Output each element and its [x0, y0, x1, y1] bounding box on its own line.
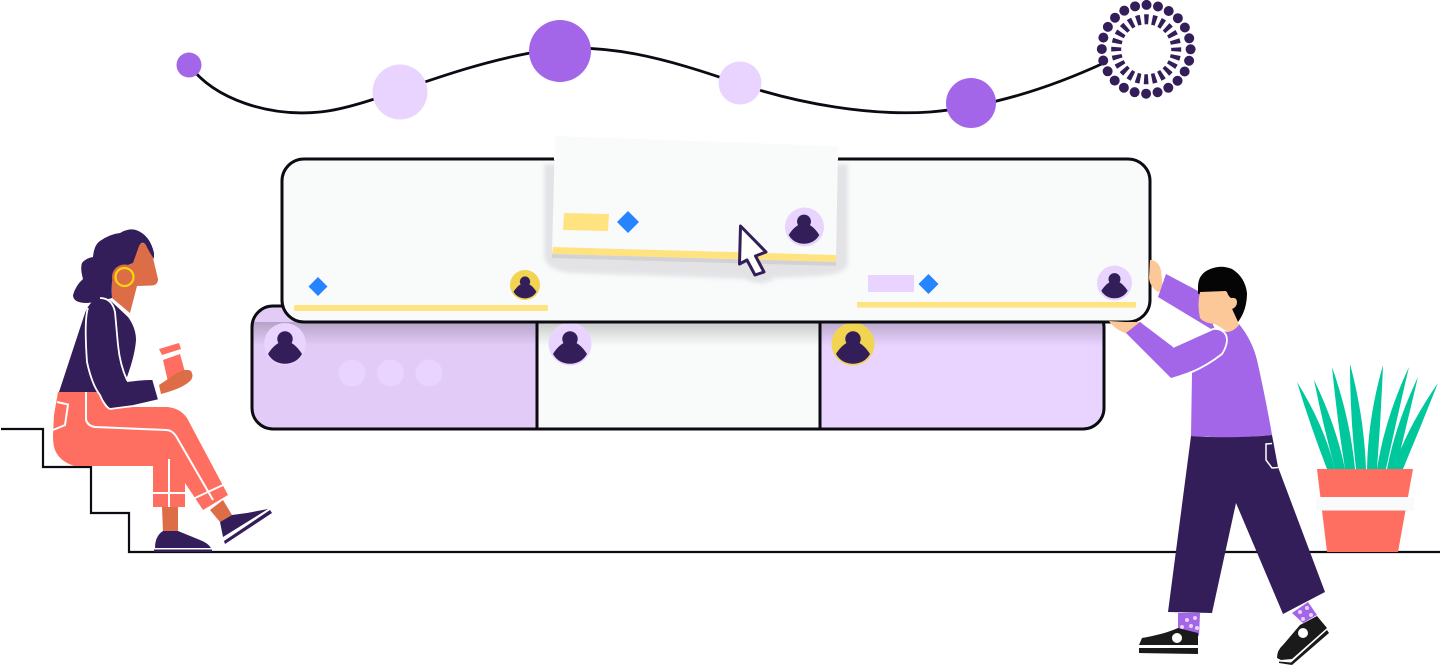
icon: mouse cursor	[740, 226, 766, 275]
figure: seated woman	[53, 229, 272, 552]
woman jacket seams	[86, 298, 159, 409]
woman hair	[73, 229, 154, 303]
milestone: pale circle two	[718, 62, 762, 104]
figure: man holding board	[1109, 260, 1329, 665]
woman shoe front	[154, 531, 212, 552]
milestone: small purple dot	[176, 52, 202, 78]
icon: blue diamond right	[918, 274, 938, 294]
man shoe back foot	[1139, 628, 1198, 654]
timeline: curved milestones line	[176, 5, 1191, 128]
woman shoe back	[220, 509, 272, 544]
woman legs	[162, 500, 232, 532]
panel: dragged card	[544, 135, 848, 283]
man face	[1198, 291, 1239, 332]
plant pot	[1317, 469, 1413, 552]
man hair	[1198, 267, 1247, 322]
bar: yellow strip	[552, 247, 836, 262]
man pocket	[1266, 444, 1278, 468]
section: right lilac	[820, 306, 1104, 429]
milestone: large purple circle	[529, 20, 591, 82]
icon: blue diamond left	[308, 277, 328, 296]
woman jacket	[59, 298, 159, 409]
avatar: lower right	[832, 322, 874, 366]
avatar: lower middle	[548, 322, 592, 366]
bar: yellow left	[294, 305, 548, 311]
icon: dotted sunburst goal	[1102, 5, 1191, 94]
woman trousers	[53, 392, 228, 510]
woman cup	[163, 354, 185, 382]
plant pot band	[1316, 497, 1414, 510]
woman earring	[116, 268, 134, 286]
icon: potted plant	[1297, 364, 1438, 552]
panel: upper timeline board	[282, 159, 1150, 322]
loading dots	[338, 360, 442, 386]
plant leaves	[1297, 364, 1438, 469]
man sleeve seam	[1173, 329, 1227, 372]
avatar: upper left	[510, 270, 540, 300]
panel: lower timeline board	[252, 306, 1104, 429]
woman hand	[159, 370, 192, 394]
woman trouser seams	[53, 392, 223, 507]
man trousers	[1168, 435, 1325, 614]
avatar: upper right	[1097, 266, 1132, 300]
man shoe front foot	[1277, 616, 1329, 665]
woman neck and face	[112, 243, 158, 313]
man socks	[1178, 602, 1317, 636]
man hands	[1109, 260, 1163, 334]
woman cup lid	[159, 343, 181, 355]
label chip: lilac	[868, 275, 914, 292]
man torso	[1191, 324, 1272, 438]
avatar: lower left	[264, 323, 306, 365]
icon: blue diamond	[617, 211, 639, 233]
man raised arm	[1158, 274, 1216, 332]
milestone: pale circle one	[372, 64, 428, 120]
section: middle white	[537, 306, 820, 429]
bar: yellow right	[857, 302, 1136, 308]
milestone: purple circle	[946, 78, 996, 128]
woman ear	[112, 264, 137, 290]
label chip: yellow	[563, 213, 609, 231]
floor and stairs line	[1, 429, 1440, 552]
avatar: card	[785, 208, 824, 246]
man front arm	[1126, 322, 1227, 378]
section: left lilac	[252, 306, 537, 429]
